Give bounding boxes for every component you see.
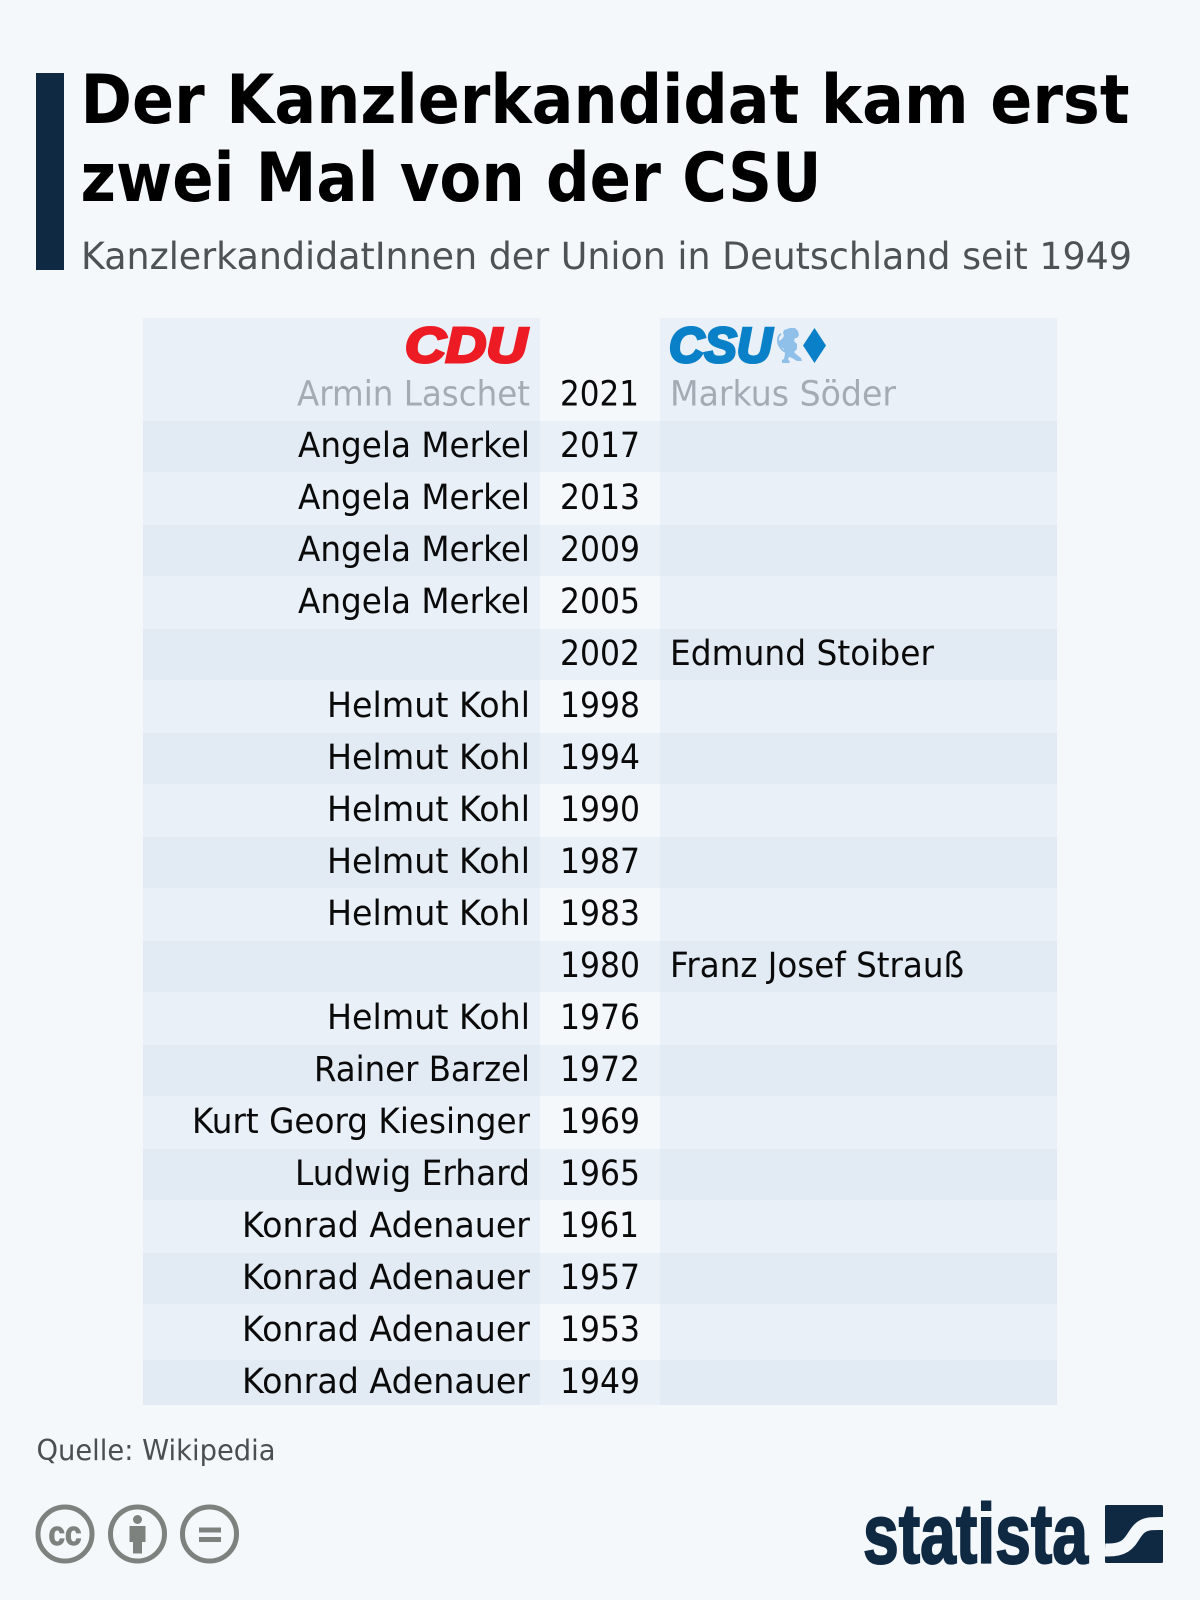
row: 2009: Angela Merkel — [298, 530, 530, 570]
logo: CSU with lion and diamond: CSU — [669, 319, 774, 373]
row: 2013 — [143, 472, 1057, 525]
title: Der Kanzlerkandidat kam erst — [80, 61, 1130, 140]
row: 1980 — [143, 941, 1057, 992]
row: 1980: 1980 — [560, 946, 640, 986]
row: 1990 — [143, 784, 1057, 837]
title — [80, 61, 1130, 218]
row: 1994: Helmut Kohl — [327, 738, 530, 778]
row: 1976 — [143, 992, 1057, 1045]
row: 1998 — [143, 680, 1057, 733]
row: 1990: Helmut Kohl — [327, 790, 530, 830]
row: 1987: 1987 — [560, 842, 640, 882]
row: 1983: Helmut Kohl — [327, 894, 530, 934]
row: 1961: 1961 — [560, 1206, 639, 1246]
row: 2013: Angela Merkel — [298, 478, 530, 518]
row: 1987: Helmut Kohl — [327, 842, 530, 882]
row: 1965: 1965 — [560, 1154, 640, 1194]
row: 1965: Ludwig Erhard — [295, 1154, 530, 1194]
row: 1961 — [143, 1200, 1057, 1253]
row: 1969 — [143, 1096, 1057, 1149]
row: 1983: 1983 — [560, 894, 640, 934]
row: 2009: 2009 — [560, 530, 640, 570]
row: 1994 — [143, 733, 1057, 784]
icon: creative commons licence — [38, 1507, 236, 1561]
row: 1949: 1949 — [560, 1362, 640, 1402]
title: zwei Mal von der CSU — [80, 139, 822, 218]
row: 2017 — [143, 421, 1057, 472]
row: 1969: 1969 — [560, 1102, 640, 1142]
row: 1987 — [143, 837, 1057, 888]
row: 2005 — [143, 576, 1057, 629]
row: 1998: 1998 — [560, 686, 640, 726]
row: 1953: 1953 — [560, 1310, 640, 1350]
row: 1972 — [143, 1045, 1057, 1096]
row: 1976: 1976 — [560, 998, 640, 1038]
row: 2021 header with party logos — [143, 318, 1057, 421]
source: Quelle: Wikipedia — [36, 1434, 276, 1467]
row: 2017: 2017 — [560, 426, 640, 466]
row: 2002 — [143, 629, 1057, 680]
row: 2013: 2013 — [560, 478, 640, 518]
row: 2021 header with party logos: 2021 — [560, 374, 639, 414]
row: 1949 — [143, 1360, 1057, 1405]
subtitle: KanzlerkandidatInnen der Union in Deutschland seit 1949 — [81, 234, 1132, 278]
row: 1953: Konrad Adenauer — [242, 1310, 531, 1350]
row: 2002: 2002 — [560, 634, 640, 674]
table — [143, 318, 1057, 1405]
row: 1969: Kurt Georg Kiesinger — [192, 1102, 531, 1142]
logo: CDU: CDU — [405, 319, 529, 373]
logo: CSU with lion and diamond — [669, 319, 826, 373]
row: 1957: 1957 — [560, 1258, 640, 1298]
row: 2017: Angela Merkel — [298, 426, 530, 466]
row: 1976: Helmut Kohl — [327, 998, 530, 1038]
row: 2009 — [143, 525, 1057, 576]
row: 1953 — [143, 1304, 1057, 1360]
row: 1972: 1972 — [560, 1050, 640, 1090]
row: 1998: Helmut Kohl — [327, 686, 530, 726]
row: 2021 header with party logos: Markus Söder — [670, 374, 897, 414]
row: 1961: Konrad Adenauer — [242, 1206, 531, 1246]
row: 1980: Franz Josef Strauß — [670, 946, 964, 986]
icon: statista mark — [1105, 1505, 1163, 1563]
icon: cc — [38, 1507, 92, 1561]
row: 1957 — [143, 1253, 1057, 1304]
icon: no derivatives — [182, 1507, 236, 1561]
row: 1965 — [143, 1149, 1057, 1200]
row: 1983 — [143, 888, 1057, 941]
icon: cc: cc — [48, 1515, 82, 1553]
row: 1994: 1994 — [560, 738, 640, 778]
icon: attribution — [110, 1507, 164, 1561]
title accent bar — [36, 73, 64, 270]
row: 1949: Konrad Adenauer — [242, 1362, 531, 1402]
row: 2005: 2005 — [560, 582, 640, 622]
row: 2021 header with party logos: Armin Laschet — [297, 374, 530, 414]
logo: statista: statista — [863, 1487, 1089, 1581]
row: 2002: Edmund Stoiber — [670, 634, 935, 674]
row: 2005: Angela Merkel — [298, 582, 530, 622]
row: 1957: Konrad Adenauer — [242, 1258, 531, 1298]
row: 1972: Rainer Barzel — [314, 1050, 530, 1090]
row: 1990: 1990 — [560, 790, 640, 830]
